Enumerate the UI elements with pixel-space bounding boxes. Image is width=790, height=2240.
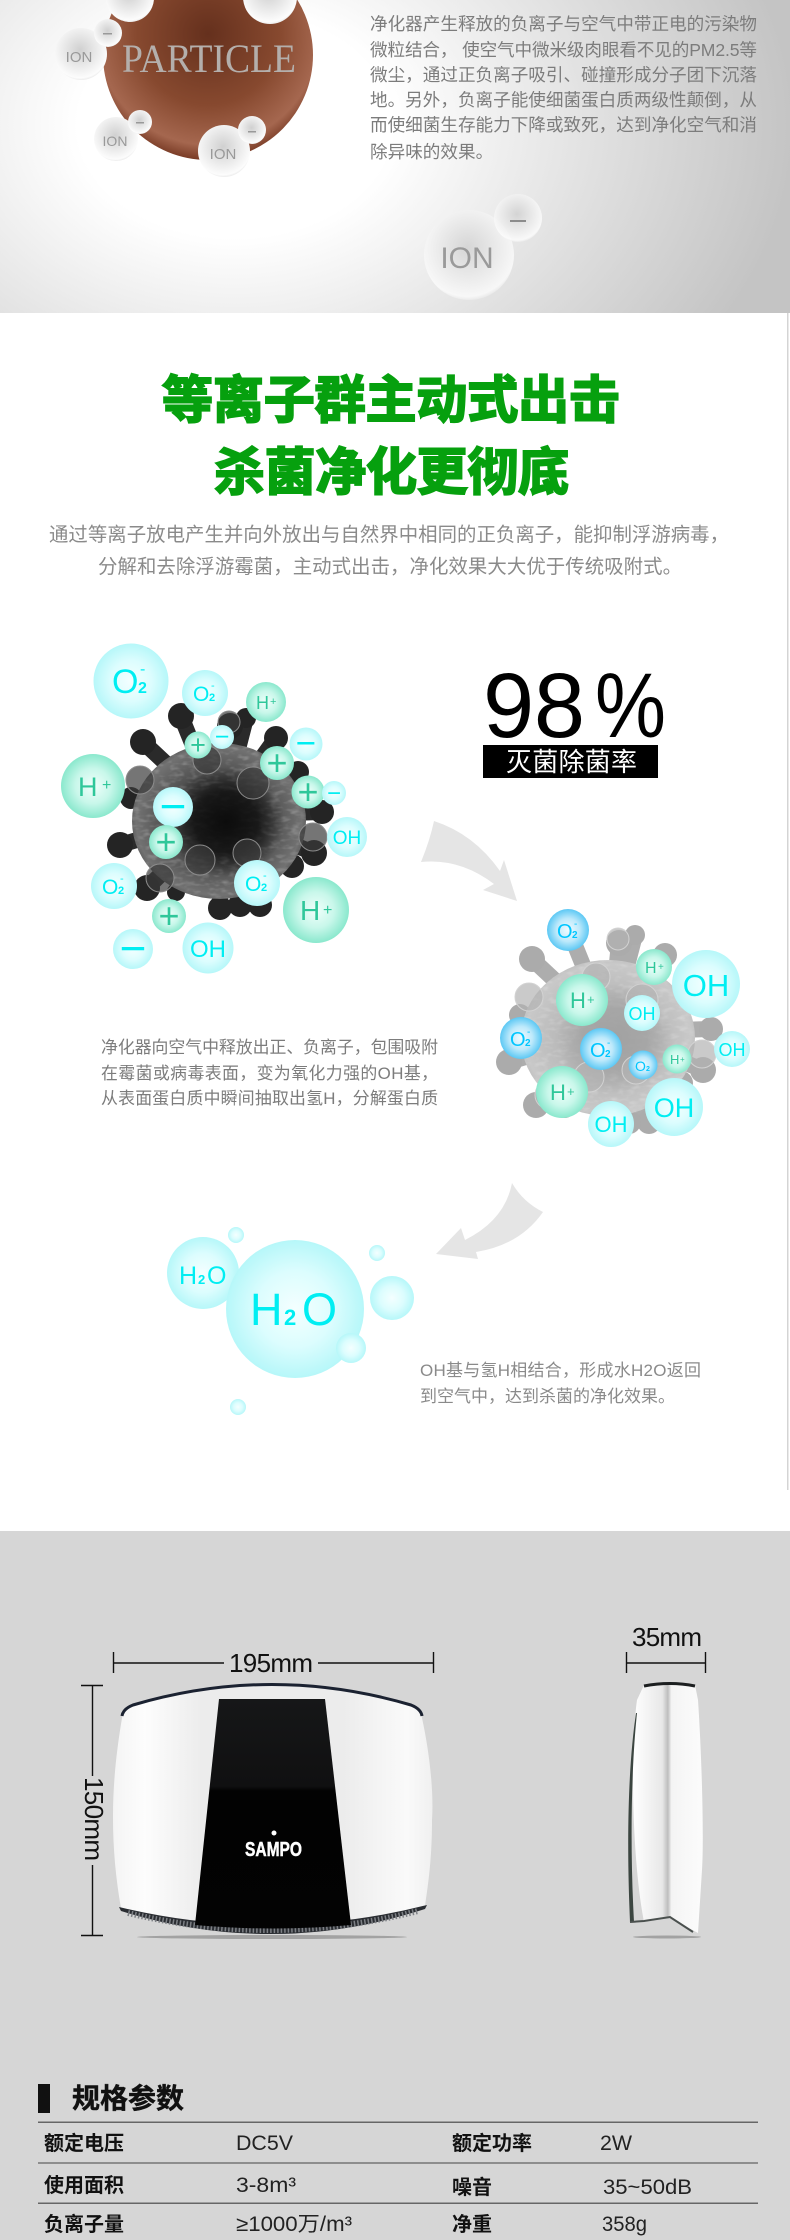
text block: step three <box>420 1361 701 1406</box>
bubble OH: OH <box>190 936 226 963</box>
illustration: particle surrounded by ions: PARTICLE <box>122 36 296 81</box>
bubble minus: − <box>327 780 341 807</box>
bubble O2- blue: - <box>607 1038 610 1049</box>
text block: step one: 在霉菌或病毒表面，变为氧化力强的OH基， <box>101 1064 438 1083</box>
bubble OH <box>714 1031 750 1067</box>
stat: 98% sterilisation rate: % <box>595 655 666 757</box>
bubble O2- blue small: O <box>635 1058 646 1074</box>
bubble H+ small: H <box>670 1052 679 1067</box>
bubble H+: + <box>102 777 111 794</box>
text block: step three: 到空气中，达到杀菌的净化效果。 <box>420 1387 675 1406</box>
bubble H+ small <box>662 1044 692 1074</box>
text block: step three: OH基与氢H相结合，形成水H2O返回 <box>420 1361 701 1380</box>
bubble plus: + <box>155 821 177 862</box>
bubble H+: + <box>587 992 595 1007</box>
row: area and noise: 35~50dB <box>603 2176 692 2199</box>
intro text <box>49 524 729 578</box>
bubble O2- blue: O <box>557 921 573 943</box>
dimension: height 150mm: 150mm <box>79 1777 109 1861</box>
bubble OH <box>645 1078 703 1136</box>
bubble OH: OH <box>718 1040 746 1060</box>
bubble H+: + <box>567 1084 575 1099</box>
text block: step one <box>101 1038 438 1108</box>
bubble OH: OH <box>594 1112 628 1137</box>
bubble H2O small <box>167 1237 239 1309</box>
row: area and noise <box>44 2174 692 2199</box>
bubble H+ <box>636 949 672 985</box>
bubble O2-: 2 <box>138 680 147 697</box>
text block: negative ion description: 而使细菌生存能力下降或致死，达到净化空气和消 <box>370 115 757 135</box>
bubble O2- <box>94 644 168 718</box>
bubble H2O large: H <box>250 1284 282 1335</box>
icon: large negative ion: ION <box>440 242 494 275</box>
intro text: 通过等离子放电产生并向外放出与自然界中相同的正负离子，能抑制浮游病毒， <box>49 524 729 546</box>
illustration: particle surrounded by ions: ION <box>66 49 92 66</box>
bubble O2-: 2 <box>261 882 267 894</box>
panel: ion particle explanation <box>0 0 790 313</box>
text block: negative ion description: 除异味的效果。 <box>370 142 493 162</box>
dimension: width 195mm <box>114 1648 434 1678</box>
bubble H+ <box>556 974 608 1026</box>
dimension: depth 35mm: 35mm <box>632 1622 702 1652</box>
illustration: faded virus with OH radicals <box>496 909 750 1147</box>
text block: step one: 净化器向空气中释放出正、负离子，包围吸附 <box>101 1038 438 1057</box>
bubble O2-: - <box>211 680 215 692</box>
bubble O2-: 2 <box>118 885 124 897</box>
bubble plus: + <box>158 895 180 936</box>
dimension: height 150mm <box>79 1685 109 1936</box>
bubble O2- blue: 2 <box>525 1038 531 1049</box>
row: voltage and power: DC5V <box>236 2132 293 2155</box>
bubble O2- blue <box>500 1017 542 1059</box>
bubble plus: + <box>297 771 319 812</box>
icon: large negative ion <box>424 194 542 300</box>
bubble plus <box>149 821 183 862</box>
bubble H+: H <box>550 1080 566 1105</box>
bubble OH: OH <box>628 1004 656 1024</box>
bubble H+: H <box>78 772 98 802</box>
illustration: particle surrounded by ions: ION <box>210 146 236 163</box>
bubble minus <box>322 780 346 807</box>
bubble O2- blue: O <box>590 1040 606 1062</box>
bubble O2-: O <box>245 873 261 896</box>
row: area and noise: 3-8m³ <box>236 2174 296 2197</box>
bubble plus <box>292 771 324 812</box>
arrow: to second virus <box>421 821 517 901</box>
bubble O2- blue small <box>628 1050 658 1080</box>
bubble OH <box>182 922 234 974</box>
bubble O2- <box>91 863 137 909</box>
bottom vent <box>119 1905 427 1934</box>
bubble O2- blue: 2 <box>605 1049 611 1060</box>
stat: 98% sterilisation rate: 98 <box>483 655 585 757</box>
bubble H+: H <box>570 988 586 1013</box>
bubble O2- blue: - <box>574 919 577 930</box>
logo <box>245 1830 302 1861</box>
bubble H+: + <box>323 902 332 919</box>
bubble H+ <box>61 754 125 818</box>
row: voltage and power: 2W <box>600 2132 632 2155</box>
title: 杀菌净化更彻底 <box>214 444 569 501</box>
title <box>162 372 620 501</box>
bubble H+: H <box>300 895 320 926</box>
bubble minus <box>113 922 153 974</box>
bubble O2- blue: 2 <box>572 930 578 941</box>
specs table <box>38 2122 758 2236</box>
bubble O2- blue <box>580 1028 622 1070</box>
bubble H2O small: H <box>179 1262 197 1290</box>
bubble minus: − <box>120 922 146 974</box>
bubble OH: OH <box>333 828 361 849</box>
logo: SAMPO <box>245 1839 302 1861</box>
bubble H+ small: + <box>680 1055 685 1064</box>
row: area and noise: 使用面积 <box>44 2174 124 2197</box>
bubble OH <box>327 817 367 857</box>
specs heading: 规格参数 <box>72 2083 184 2114</box>
bubble H2O small: O <box>207 1262 226 1290</box>
bubble minus: − <box>160 780 186 832</box>
text block: negative ion description: 地。另外，负离子能使细菌蛋白质两级性颠倒，从 <box>370 90 757 110</box>
row: voltage and power <box>44 2131 632 2155</box>
stat: 98% sterilisation rate: 灭菌除菌率 <box>506 747 637 777</box>
bubble plus <box>184 730 212 760</box>
row: ion output and weight: ≥1000万/m³ <box>236 2213 352 2236</box>
illustration: water molecules <box>167 1227 414 1415</box>
bubble H+ <box>283 877 349 943</box>
bubble H+ <box>536 1066 588 1118</box>
bubble H2O large <box>226 1240 364 1378</box>
row: ion output and weight: 负离子量 <box>44 2212 124 2236</box>
text block: negative ion description: 净化器产生释放的负离子与空气中带正电的污染物 <box>370 14 757 34</box>
bubble H+: + <box>658 962 664 973</box>
row: ion output and weight: 358g <box>602 2213 647 2236</box>
stat: 98% sterilisation rate <box>483 655 666 778</box>
bubble H+ <box>246 682 286 722</box>
bubble O2- blue: - <box>527 1027 530 1038</box>
bubble minus <box>210 723 234 751</box>
dimension: depth 35mm <box>626 1622 706 1673</box>
text block: negative ion description: 微粒结合， 使空气中微米级肉眼看不见的PM2.5等 <box>370 40 757 60</box>
bubble minus: − <box>296 724 316 763</box>
product: side view <box>628 1684 703 1938</box>
title: 等离子群主动式出击 <box>162 372 620 429</box>
bubble OH: OH <box>654 1093 694 1123</box>
bubble minus: − <box>215 723 229 751</box>
bubble H2O large: O <box>302 1284 337 1335</box>
bubble O2- blue: O <box>510 1029 526 1051</box>
intro text: 分解和去除浮游霉菌，主动式出击，净化效果大大优于传统吸附式。 <box>98 556 682 578</box>
row: voltage and power: 额定电压 <box>44 2131 124 2155</box>
bubble OH <box>588 1101 634 1147</box>
right edge line <box>787 313 788 1490</box>
bubble O2- blue <box>547 909 589 951</box>
bubble O2- blue small: 2 <box>646 1066 650 1073</box>
bubble O2-: - <box>120 873 124 885</box>
row: ion output and weight <box>44 2212 647 2236</box>
bubble plus: + <box>266 742 288 783</box>
bubble O2-: 2 <box>209 692 215 704</box>
bubble O2-: O <box>112 663 138 701</box>
bubble OH: OH <box>683 968 729 1003</box>
bubble minus <box>290 724 322 763</box>
illustration: particle surrounded by ions: ION <box>103 133 127 149</box>
row: area and noise: 噪音 <box>452 2175 492 2199</box>
bubble O2-: O <box>102 876 118 899</box>
bubble O2-: - <box>140 661 145 678</box>
bubble plus <box>260 742 294 783</box>
bubble O2- <box>234 860 280 906</box>
bubble H2O small: 2 <box>198 1272 205 1287</box>
text block: negative ion description <box>370 14 757 162</box>
arrow: to water <box>436 1183 543 1259</box>
bubble O2-: O <box>193 683 209 706</box>
text block: negative ion description: 微尘，通过正负离子吸引、碰撞形成分子团下沉落 <box>370 65 757 85</box>
bubble H+: H <box>645 960 657 977</box>
illustration: particle surrounded by ions <box>55 0 313 177</box>
dimension: width 195mm: 195mm <box>229 1648 313 1678</box>
bubble H+: + <box>270 696 276 708</box>
panel: dimensions and specifications <box>0 1531 790 2240</box>
bubble O2- <box>182 670 228 716</box>
bubble OH <box>672 950 740 1018</box>
bubble minus <box>153 780 193 832</box>
bubble OH <box>624 995 660 1031</box>
bubble O2-: - <box>263 870 267 882</box>
bubble H+: H <box>256 693 269 713</box>
product: front view <box>113 1684 432 1939</box>
bubble plus: + <box>190 730 206 760</box>
bubble plus <box>152 895 186 936</box>
text block: step one: 从表面蛋白质中瞬间抽取出氢H，分解蛋白质 <box>101 1089 438 1108</box>
illustration: virus surrounded by ions <box>61 644 367 974</box>
row: ion output and weight: 净重 <box>452 2213 492 2236</box>
front glass panel <box>195 1699 351 1928</box>
bubble H2O large: 2 <box>284 1305 296 1330</box>
droplets <box>228 1227 414 1415</box>
row: voltage and power: 额定功率 <box>452 2131 532 2155</box>
